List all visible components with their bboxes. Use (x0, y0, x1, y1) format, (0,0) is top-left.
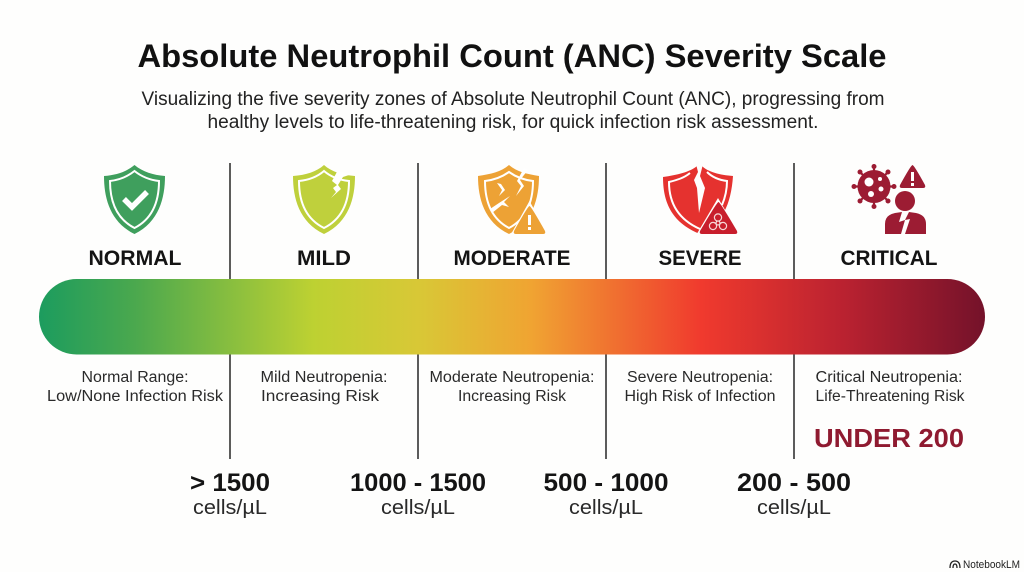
icon: severe broken shield with biohazard (663, 164, 741, 237)
zone descriptions: Life-Threatening Risk (816, 388, 965, 405)
subtitle: Visualizing the five severity zones of Absolute Neutrophil Count (ANC), progressing from (142, 89, 884, 110)
critical threshold callout: UNDER 200 (814, 423, 964, 453)
subtitle: healthy levels to life-threatening risk, for quick infection risk assessment. (208, 112, 818, 133)
icon: critical virus, warning and patient (852, 164, 926, 234)
zone descriptions: Increasing Risk (458, 388, 566, 405)
threshold values: cells/µL (381, 497, 455, 519)
zone descriptions: High Risk of Infection (624, 388, 776, 405)
zone headings: CRITICAL (840, 246, 938, 270)
zone descriptions: Severe Neutropenia: (627, 369, 773, 386)
threshold values: cells/µL (569, 497, 643, 519)
threshold values: > 1500 (190, 469, 270, 497)
zone headings: MODERATE (454, 246, 570, 270)
threshold values: 1000 - 1500 (350, 469, 486, 497)
zone headings: MILD (297, 246, 351, 270)
threshold values: 200 - 500 (737, 469, 851, 497)
zone descriptions: Increasing Risk (261, 388, 379, 405)
threshold values: cells/µL (193, 497, 267, 519)
zone descriptions: Normal Range: (82, 369, 188, 386)
zone headings: NORMAL (88, 246, 182, 270)
zone descriptions: Critical Neutropenia: (816, 369, 962, 386)
threshold values: cells/µL (757, 497, 831, 519)
threshold values: 500 - 1000 (544, 469, 668, 497)
zone descriptions (47, 369, 965, 405)
threshold values (190, 469, 851, 519)
subtitle (142, 89, 884, 133)
zone headings: SEVERE (658, 246, 742, 270)
title: Absolute Neutrophil Count (ANC) Severity Scale (138, 38, 886, 74)
NotebookLM watermark: NotebookLM (963, 559, 1020, 571)
zone descriptions: Mild Neutropenia: (260, 369, 388, 386)
zone headings (88, 246, 938, 270)
icon: normal shield with check (104, 165, 165, 234)
zone descriptions: Moderate Neutropenia: (430, 369, 594, 386)
icon: moderate cracked shield with warning (478, 165, 549, 236)
zone descriptions: Low/None Infection Risk (47, 388, 223, 405)
severity gradient bar (39, 279, 985, 354)
icon: mild cracked shield (293, 165, 355, 234)
